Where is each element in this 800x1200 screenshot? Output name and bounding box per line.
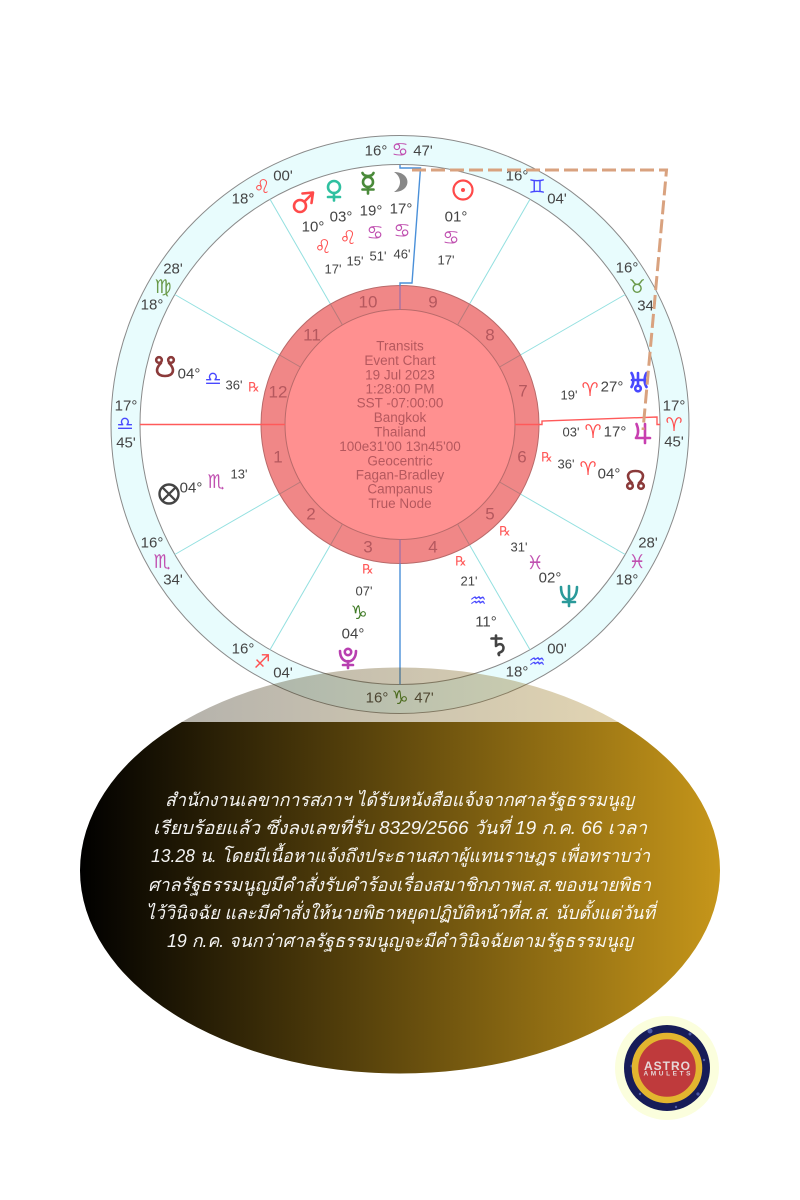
planet: mercury: ♋ — [366, 222, 384, 244]
logo: Astro Amulets: ASTRO — [644, 1059, 690, 1073]
planet: moon: 46' — [394, 246, 410, 262]
planet: part of fortune: ♏ — [207, 471, 225, 493]
planet: north node — [541, 450, 644, 489]
zodiac cusp labels: 16° — [141, 534, 163, 552]
planet: moon — [390, 172, 412, 262]
zodiac cusp labels: ♋ — [391, 139, 409, 161]
planet: venus: ♌ — [339, 227, 357, 249]
zodiac cusp labels: 34' — [637, 298, 657, 314]
planet: pluto: ♑ — [350, 602, 368, 624]
zodiac cusp labels: ♌ — [253, 176, 271, 198]
zodiac cusp labels: ♊ — [528, 176, 546, 198]
planet: part of fortune: 13' — [231, 466, 247, 482]
chart details text — [339, 338, 461, 511]
centre disc with house numbers: 8 — [485, 326, 495, 344]
planet: saturn: 11° — [475, 614, 497, 630]
planet: neptune: 31' — [511, 540, 527, 554]
zodiac cusp labels: 16° — [506, 168, 528, 184]
astrology chart wheel — [111, 136, 689, 714]
zodiac cusp labels: 34' — [163, 572, 183, 588]
body text: 19 ก.ค. จนกว่าศาลรัฐธรรมนูญจะมีคำวินิจฉัยตามรัฐธรรมนูญ — [167, 931, 635, 952]
zodiac cusp labels: 16° — [365, 142, 387, 160]
body text: เรียบร้อยแล้ว ซึ่งลงเลขที่รับ 8329/2566 วันที่ 19 ก.ค. 66 เวลา — [153, 815, 648, 838]
zodiac cusp labels: 18° — [616, 572, 638, 588]
centre disc with house numbers: 9 — [428, 292, 438, 312]
zodiac cusp labels: ♎ — [116, 413, 134, 435]
planet: neptune: ℞ — [499, 524, 511, 540]
zodiac cusp labels: 17° — [663, 398, 685, 414]
planet: pluto: 04° — [342, 626, 364, 642]
centre disc with house numbers: 6 — [517, 448, 527, 466]
zodiac cusp labels: 47' — [414, 690, 434, 706]
centre disc with house numbers: 4 — [428, 538, 438, 556]
centre disc with house numbers — [261, 286, 539, 564]
chart details text: 100e31'00 13n45'00 — [339, 439, 461, 454]
zodiac cusp labels: 18° — [506, 664, 528, 680]
zodiac cusp labels: ♐ — [253, 651, 271, 673]
zodiac ring — [126, 150, 674, 699]
planet: uranus — [561, 373, 646, 402]
planet: sun: 01° — [445, 208, 467, 226]
chart details text: Fagan-Bradley — [356, 468, 445, 482]
centre disc with house numbers: 1 — [273, 448, 283, 466]
zodiac cusp labels: ♈ — [665, 414, 683, 436]
horizon axis lines — [140, 417, 660, 424]
planet: neptune: 02° — [539, 570, 561, 586]
chart details text: 1:28:00 PM — [365, 382, 435, 396]
centre disc with house numbers: 7 — [518, 382, 528, 400]
body text — [146, 789, 658, 952]
planet: saturn: ♒ — [469, 590, 487, 612]
zodiac cusp labels — [115, 139, 685, 709]
planet: pluto — [340, 562, 374, 668]
planet: sun: ♋ — [442, 227, 460, 249]
zodiac cusp labels: 16° — [616, 260, 638, 276]
chart details text: SST -07:00:00 — [357, 396, 443, 410]
planet: uranus: 27° — [601, 378, 623, 396]
meridian axis lines — [400, 165, 420, 684]
planet: pluto: 07' — [356, 584, 372, 598]
planet: mars: 10° — [302, 218, 324, 236]
planet: mercury — [360, 173, 386, 264]
planet: mercury: 51' — [370, 248, 386, 264]
planet: neptune — [499, 524, 577, 606]
centre disc with house numbers: 11 — [303, 326, 321, 344]
dashed aspect line — [412, 170, 666, 430]
zodiac cusp labels: 00' — [273, 168, 293, 184]
zodiac cusp labels: 04' — [547, 190, 567, 208]
planet: south node — [156, 357, 260, 396]
logo: Astro Amulets: AMULETS — [644, 1070, 691, 1078]
planet: saturn — [455, 554, 503, 655]
planet: moon: ♋ — [393, 220, 411, 242]
planet: north node: ℞ — [541, 450, 553, 466]
planet: part of fortune — [160, 466, 247, 504]
centre disc with house numbers: 2 — [306, 504, 316, 524]
chart details text: True Node — [368, 496, 432, 511]
zodiac cusp labels: 17° — [115, 398, 137, 414]
centre disc with house numbers: 3 — [363, 538, 373, 556]
planet: mars: 17' — [325, 262, 341, 276]
planet: part of fortune: 04° — [180, 480, 202, 496]
planet: north node: ♈ — [579, 458, 597, 480]
centre disc with house numbers: 10 — [359, 292, 377, 312]
planet: mars — [294, 192, 341, 276]
planet: venus: 03° — [330, 208, 352, 226]
zodiac cusp labels: 28' — [163, 260, 183, 278]
zodiac cusp labels: ♓ — [628, 551, 646, 573]
chart details text: Geocentric — [367, 454, 433, 468]
zodiac cusp labels: 16° — [232, 640, 254, 658]
zodiac cusp labels: ♑ — [391, 687, 409, 709]
chart details text: Bangkok — [374, 410, 427, 425]
planet: mars: ♌ — [314, 236, 332, 258]
planet: jupiter: 03' — [563, 424, 579, 440]
zodiac cusp labels: 47' — [413, 142, 433, 160]
planet: south node: ♎ — [204, 368, 222, 390]
chart details text: Campanus — [367, 482, 433, 496]
planet: uranus: ♈ — [581, 379, 599, 401]
planet: venus — [328, 181, 363, 268]
planet: north node: 36' — [558, 456, 574, 472]
planet: jupiter — [563, 421, 650, 443]
zodiac cusp labels: 18° — [141, 296, 163, 314]
planet: neptune: ♓ — [526, 552, 544, 574]
zodiac cusp labels: ♉ — [628, 276, 646, 298]
planet: sun — [438, 180, 472, 268]
planet: mercury: 19° — [360, 202, 382, 220]
body text: 13.28 น. โดยมีเนื้อหาแจ้งถึงประธานสภาผู้แทนราษฎร เพื่อทราบว่า — [151, 842, 651, 867]
zodiac cusp labels: 45' — [664, 434, 684, 450]
planet: saturn: 21' — [461, 574, 477, 588]
zodiac cusp labels: 18° — [232, 190, 254, 208]
zodiac cusp labels: ♍ — [154, 276, 172, 298]
zodiac cusp labels: 04' — [273, 664, 293, 682]
planet: jupiter: ♈ — [584, 421, 602, 443]
zodiac cusp labels: 16° — [366, 690, 388, 706]
zodiac cusp labels: 00' — [547, 640, 567, 658]
planet: north node: 04° — [598, 466, 620, 482]
zodiac cusp labels: 28' — [638, 534, 658, 552]
body text: ศาลรัฐธรรมนูญมีคำสั่งรับคำร้องเรื่องสมาชิกภาพส.ส.ของนายพิธา — [148, 872, 652, 896]
body text: ไว้วินิจฉัย และมีคำสั่งให้นายพิธาหยุดปฏิบัติหน้าที่ส.ส. นับตั้งแต่วันที่ — [146, 899, 658, 924]
planet: moon: 17° — [390, 200, 412, 218]
planet: sun: 17' — [438, 252, 454, 268]
planet: uranus: 19' — [561, 388, 577, 402]
chart details text: Transits — [376, 338, 424, 354]
planet: south node: 36' — [226, 378, 242, 392]
zodiac cusp labels: 45' — [116, 434, 136, 452]
centre disc with house numbers: 5 — [485, 504, 495, 524]
chart details text: Event Chart — [364, 353, 436, 368]
planet: jupiter: 17° — [604, 424, 626, 440]
logo: Astro Amulets — [615, 1016, 719, 1120]
planet: venus: 15' — [347, 254, 363, 268]
chart details text: 19 Jul 2023 — [365, 368, 435, 382]
planet: south node: ℞ — [248, 380, 260, 396]
planet: saturn: ℞ — [455, 554, 467, 570]
body text: สำนักงานเลขาการสภาฯ ได้รับหนังสือแจ้งจากศาลรัฐธรรมนูญ — [165, 789, 636, 811]
house cusp lines — [175, 199, 625, 650]
planet: south node: 04° — [178, 366, 200, 382]
zodiac cusp labels: ♏ — [153, 551, 171, 573]
gradient ellipse text panel — [80, 668, 720, 1074]
centre disc with house numbers: 12 — [269, 382, 287, 402]
zodiac cusp labels: ♒ — [528, 651, 546, 673]
planet: pluto: ℞ — [362, 562, 374, 578]
chart details text: Thailand — [374, 424, 426, 440]
